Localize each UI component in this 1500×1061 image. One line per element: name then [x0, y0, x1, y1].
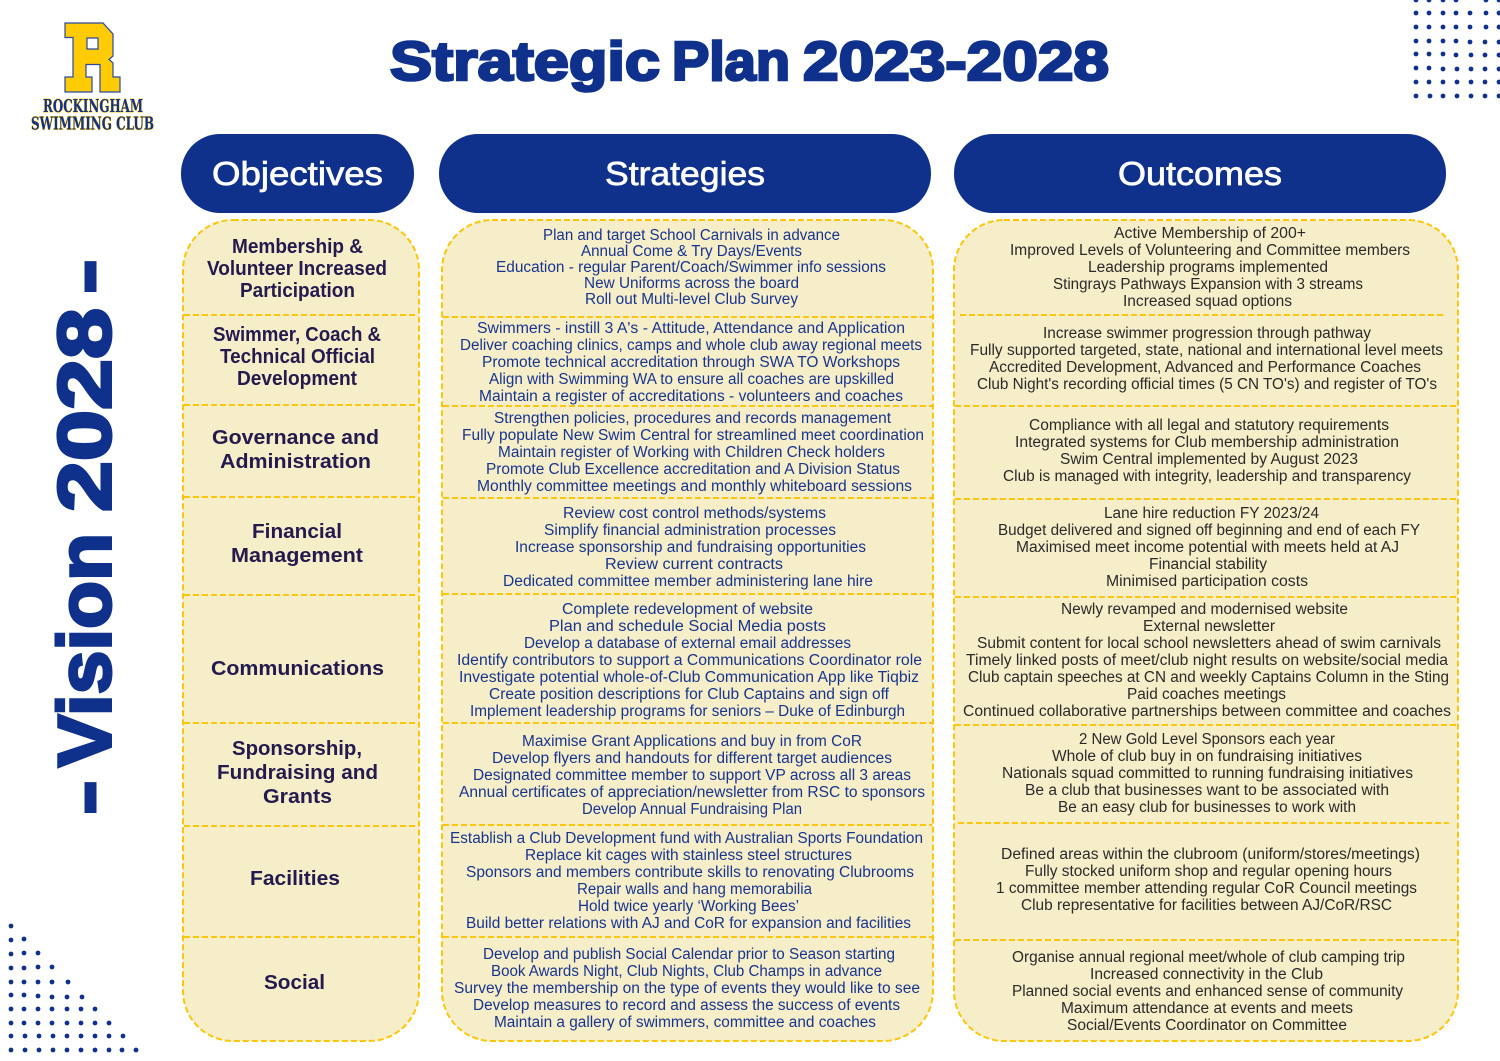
strategies: governance: Maintain register of Working with Children Check holders — [498, 444, 885, 461]
objective: financial: Financial — [252, 521, 342, 543]
objective: sponsorship: Sponsorship, — [232, 738, 362, 760]
outcomes: communications: Continued collaborative partnerships between committee and coaches — [963, 703, 1451, 720]
header pill: Outcomes: Outcomes — [1118, 155, 1282, 192]
strategies: communications — [457, 601, 922, 720]
objective: financial: Management — [231, 545, 363, 567]
outcomes: development: Accredited Development, Advanced and Performance Coaches — [989, 359, 1421, 376]
outcomes: membership: Active Membership of 200+ — [1114, 225, 1306, 242]
outcomes: communications: Timely linked posts of meet/club night results on website/social media — [966, 652, 1448, 669]
header pill: Outcomes — [954, 134, 1446, 213]
outcomes: facilities: Club representative for facilities between AJ/CoR/RSC — [1021, 897, 1392, 914]
strategies: social: Book Awards Night, Club Nights, Club Champs in advance — [491, 963, 882, 980]
strategies: membership — [496, 227, 886, 308]
strategies: governance: Monthly committee meetings and monthly whiteboard sessions — [477, 478, 912, 495]
icon: yellow varsity letter R — [65, 23, 120, 92]
objective: membership: Membership & — [232, 236, 363, 258]
outcomes: financial: Maximised meet income potential with meets held at AJ — [1016, 539, 1399, 556]
outcomes: membership — [1010, 225, 1410, 310]
outcomes: facilities — [996, 846, 1420, 914]
strategies: social: Develop and publish Social Calendar prior to Season starting — [483, 946, 895, 963]
strategies: sponsorship: Annual certificates of appreciation/newsletter from RSC to sponsors — [459, 784, 925, 801]
vertical heading: Vision 2028: 2028 — [42, 308, 126, 512]
objective: sponsorship — [217, 738, 378, 808]
outcomes: development: Club Night's recording official times (5 CN TO's) and register of TO's — [977, 376, 1437, 393]
strategies: financial: Increase sponsorship and fundraising opportunities — [515, 539, 866, 556]
vertical heading: Vision 2028: - — [42, 780, 126, 815]
title: Strategic — [390, 30, 660, 92]
outcomes: facilities: Defined areas within the clubroom (uniform/stores/meetings) — [1001, 846, 1420, 863]
outcomes: social: Increased connectivity in the Club — [1090, 966, 1323, 983]
strategies: communications: Develop a database of external email addresses — [524, 635, 851, 652]
strategies: social: Maintain a gallery of swimmers, committee and coaches — [494, 1014, 876, 1031]
strategies: financial: Dedicated committee member administering lane hire — [503, 573, 873, 590]
title — [390, 30, 1109, 92]
strategies: financial: Review cost control methods/systems — [563, 505, 826, 522]
strategies: membership: Education - regular Parent/Coach/Swimmer info sessions — [496, 259, 886, 276]
strategies: communications: Create position descriptions for Club Captains and sign off — [489, 686, 890, 703]
strategies: communications: Investigate potential whole-of-Club Communication App like Tiqbiz — [459, 669, 919, 686]
logo wordmark: SWIMMING CLUB — [31, 114, 154, 134]
outcomes: sponsorship: Whole of club buy in on fundraising initiatives — [1052, 748, 1362, 765]
strategies: development: Swimmers - instill 3 A's - Attitude, Attendance and Application — [477, 320, 905, 337]
outcomes: social: Organise annual regional meet/whole of club camping trip — [1012, 949, 1405, 966]
outcomes: communications: Paid coaches meetings — [1127, 686, 1286, 703]
objective: membership — [207, 236, 387, 302]
strategies: financial — [503, 505, 873, 590]
strategies: development: Align with Swimming WA to ensure all coaches are upskilled — [489, 371, 894, 388]
outcomes: sponsorship: Nationals squad committed to running fundraising initiatives — [1002, 765, 1413, 782]
outcomes: facilities: Fully stocked uniform shop and regular opening hours — [1025, 863, 1392, 880]
outcomes: communications: Submit content for local school newsletters ahead of swim carnivals — [977, 635, 1441, 652]
strategies: financial: Simplify financial administration processes — [544, 522, 836, 539]
vertical heading: Vision 2028 — [42, 259, 126, 815]
outcomes: governance: Swim Central implemented by August 2023 — [1060, 451, 1358, 468]
strategies: membership: Annual Come & Try Days/Events — [581, 243, 802, 260]
strategies: facilities: Repair walls and hang memorabilia — [577, 881, 812, 898]
strategies: membership: New Uniforms across the board — [584, 275, 799, 292]
outcomes: sponsorship: Be an easy club for businesses to work with — [1058, 799, 1356, 816]
logo: Rockingham Swimming Club — [31, 23, 154, 134]
objective: development — [213, 324, 381, 390]
outcomes: communications: Club captain speeches at CN and weekly Captains Column in the Sting — [968, 669, 1449, 686]
strategies: social — [454, 946, 920, 1031]
objective: governance: Governance and — [212, 427, 379, 449]
header pill: Objectives: Objectives — [212, 155, 383, 192]
outcomes: membership: Leadership programs implemented — [1088, 259, 1328, 276]
strategies: governance: Promote Club Excellence accreditation and A Division Status — [486, 461, 900, 478]
objective: social: Social — [264, 972, 325, 994]
logo wordmark — [31, 96, 154, 134]
outcomes: financial — [998, 505, 1420, 590]
strategies: governance: Fully populate New Swim Central for streamlined meet coordination — [462, 427, 924, 444]
title: Plan — [672, 30, 790, 92]
outcomes: governance: Compliance with all legal and statutory requirements — [1029, 417, 1389, 434]
strategies: sponsorship — [459, 733, 925, 818]
strategies: development — [460, 320, 922, 405]
outcomes: development — [970, 325, 1443, 393]
outcomes: development: Increase swimmer progression through pathway — [1043, 325, 1371, 342]
strategies: facilities: Hold twice yearly ‘Working Bees’ — [578, 898, 799, 915]
objective: governance: Administration — [220, 451, 371, 473]
objective: development: Development — [237, 368, 357, 390]
outcomes: communications: Newly revamped and modernised website — [1061, 601, 1348, 618]
outcomes: sponsorship: 2 New Gold Level Sponsors each year — [1079, 731, 1335, 748]
strategies: membership: Roll out Multi-level Club Survey — [585, 291, 798, 308]
objective: development: Technical Official — [220, 346, 375, 368]
objective: sponsorship: Grants — [263, 786, 332, 808]
strategies: sponsorship: Maximise Grant Applications and buy in from CoR — [522, 733, 862, 750]
outcomes: financial: Budget delivered and signed off beginning and end of each FY — [998, 522, 1420, 539]
outcomes: social: Social/Events Coordinator on Committee — [1067, 1017, 1347, 1034]
outcomes: facilities: 1 committee member attending regular CoR Council meetings — [996, 880, 1417, 897]
strategies: communications: Implement leadership programs for seniors – Duke of Edinburgh — [470, 703, 905, 720]
outcomes: communications — [963, 601, 1451, 720]
outcomes: governance: Integrated systems for Club membership administration — [1015, 434, 1399, 451]
objective: membership: Volunteer Increased — [207, 258, 387, 280]
strategies: social: Develop measures to record and assess the success of events — [473, 997, 900, 1014]
strategies: facilities: Replace kit cages with stainless steel structures — [525, 847, 852, 864]
strategies: membership: Plan and target School Carnivals in advance — [543, 227, 840, 244]
objective: financial — [231, 521, 363, 567]
objective: development: Swimmer, Coach & — [213, 324, 381, 346]
strategies: governance — [462, 410, 924, 495]
strategies: communications: Complete redevelopment of website — [562, 601, 813, 618]
objective: governance — [212, 427, 379, 473]
strategies: facilities: Establish a Club Development fund with Australian Sports Foundation — [450, 830, 923, 847]
outcomes: social — [1012, 949, 1405, 1034]
outcomes: development: Fully supported targeted, state, national and international level meets — [970, 342, 1443, 359]
strategies: development: Deliver coaching clinics, camps and whole club away regional meets — [460, 337, 922, 354]
strategies: development: Promote technical accreditation through SWA TO Workshops — [482, 354, 900, 371]
strategies: social: Survey the membership on the type of events they would like to see — [454, 980, 920, 997]
objective: sponsorship: Fundraising and — [217, 762, 378, 784]
outcomes: financial: Financial stability — [1149, 556, 1267, 573]
outcomes: financial: Lane hire reduction FY 2023/24 — [1104, 505, 1319, 522]
outcomes: governance — [1003, 417, 1411, 485]
strategies: financial: Review current contracts — [605, 556, 783, 573]
outcomes: membership: Improved Levels of Volunteering and Committee members — [1010, 242, 1410, 259]
strategies: governance: Strengthen policies, procedures and records management — [494, 410, 892, 427]
header pill: Strategies — [439, 134, 931, 213]
panel: outcomes — [954, 220, 1458, 1041]
header pill: Strategies: Strategies — [605, 155, 765, 192]
decorative dots: bottom left — [9, 924, 138, 1052]
panel: strategies — [442, 220, 933, 1041]
panel: objectives — [183, 220, 419, 1041]
strategies: sponsorship: Designated committee member to support VP across all 3 areas — [473, 767, 911, 784]
outcomes: communications: External newsletter — [1143, 618, 1275, 635]
outcomes: membership: Stingrays Pathways Expansion with 3 streams — [1053, 276, 1363, 293]
outcomes: sponsorship — [1002, 731, 1413, 816]
header pill: Objectives — [181, 134, 414, 213]
decorative dots: top right — [1414, 0, 1500, 98]
outcomes: social: Maximum attendance at events and meets — [1061, 1000, 1353, 1017]
strategies: facilities: Build better relations with AJ and CoR for expansion and facilities — [466, 915, 911, 932]
logo wordmark: ROCKINGHAM — [43, 96, 143, 117]
strategies: facilities — [450, 830, 923, 932]
outcomes: social: Planned social events and enhanced sense of community — [1012, 983, 1403, 1000]
title: 2023-2028 — [803, 30, 1109, 92]
strategies: sponsorship: Develop flyers and handouts for different target audiences — [492, 750, 892, 767]
vertical heading: Vision 2028: - — [42, 259, 126, 294]
outcomes: financial: Minimised participation costs — [1106, 573, 1308, 590]
strategies: facilities: Sponsors and members contribute skills to renovating Clubrooms — [466, 864, 914, 881]
objective: communications: Communications — [211, 658, 384, 680]
outcomes: sponsorship: Be a club that businesses want to be associated with — [1025, 782, 1389, 799]
objective: membership: Participation — [240, 280, 355, 302]
objective: facilities: Facilities — [250, 868, 340, 890]
strategies: communications: Plan and schedule Social Media posts — [549, 618, 826, 635]
strategies: development: Maintain a register of accreditations - volunteers and coaches — [479, 388, 903, 405]
outcomes: membership: Increased squad options — [1123, 293, 1292, 310]
outcomes: governance: Club is managed with integrity, leadership and transparency — [1003, 468, 1411, 485]
vertical heading: Vision 2028: Vision — [42, 533, 126, 767]
strategies: sponsorship: Develop Annual Fundraising Plan — [582, 801, 802, 818]
strategies: communications: Identify contributors to support a Communications Coordinator role — [457, 652, 922, 669]
